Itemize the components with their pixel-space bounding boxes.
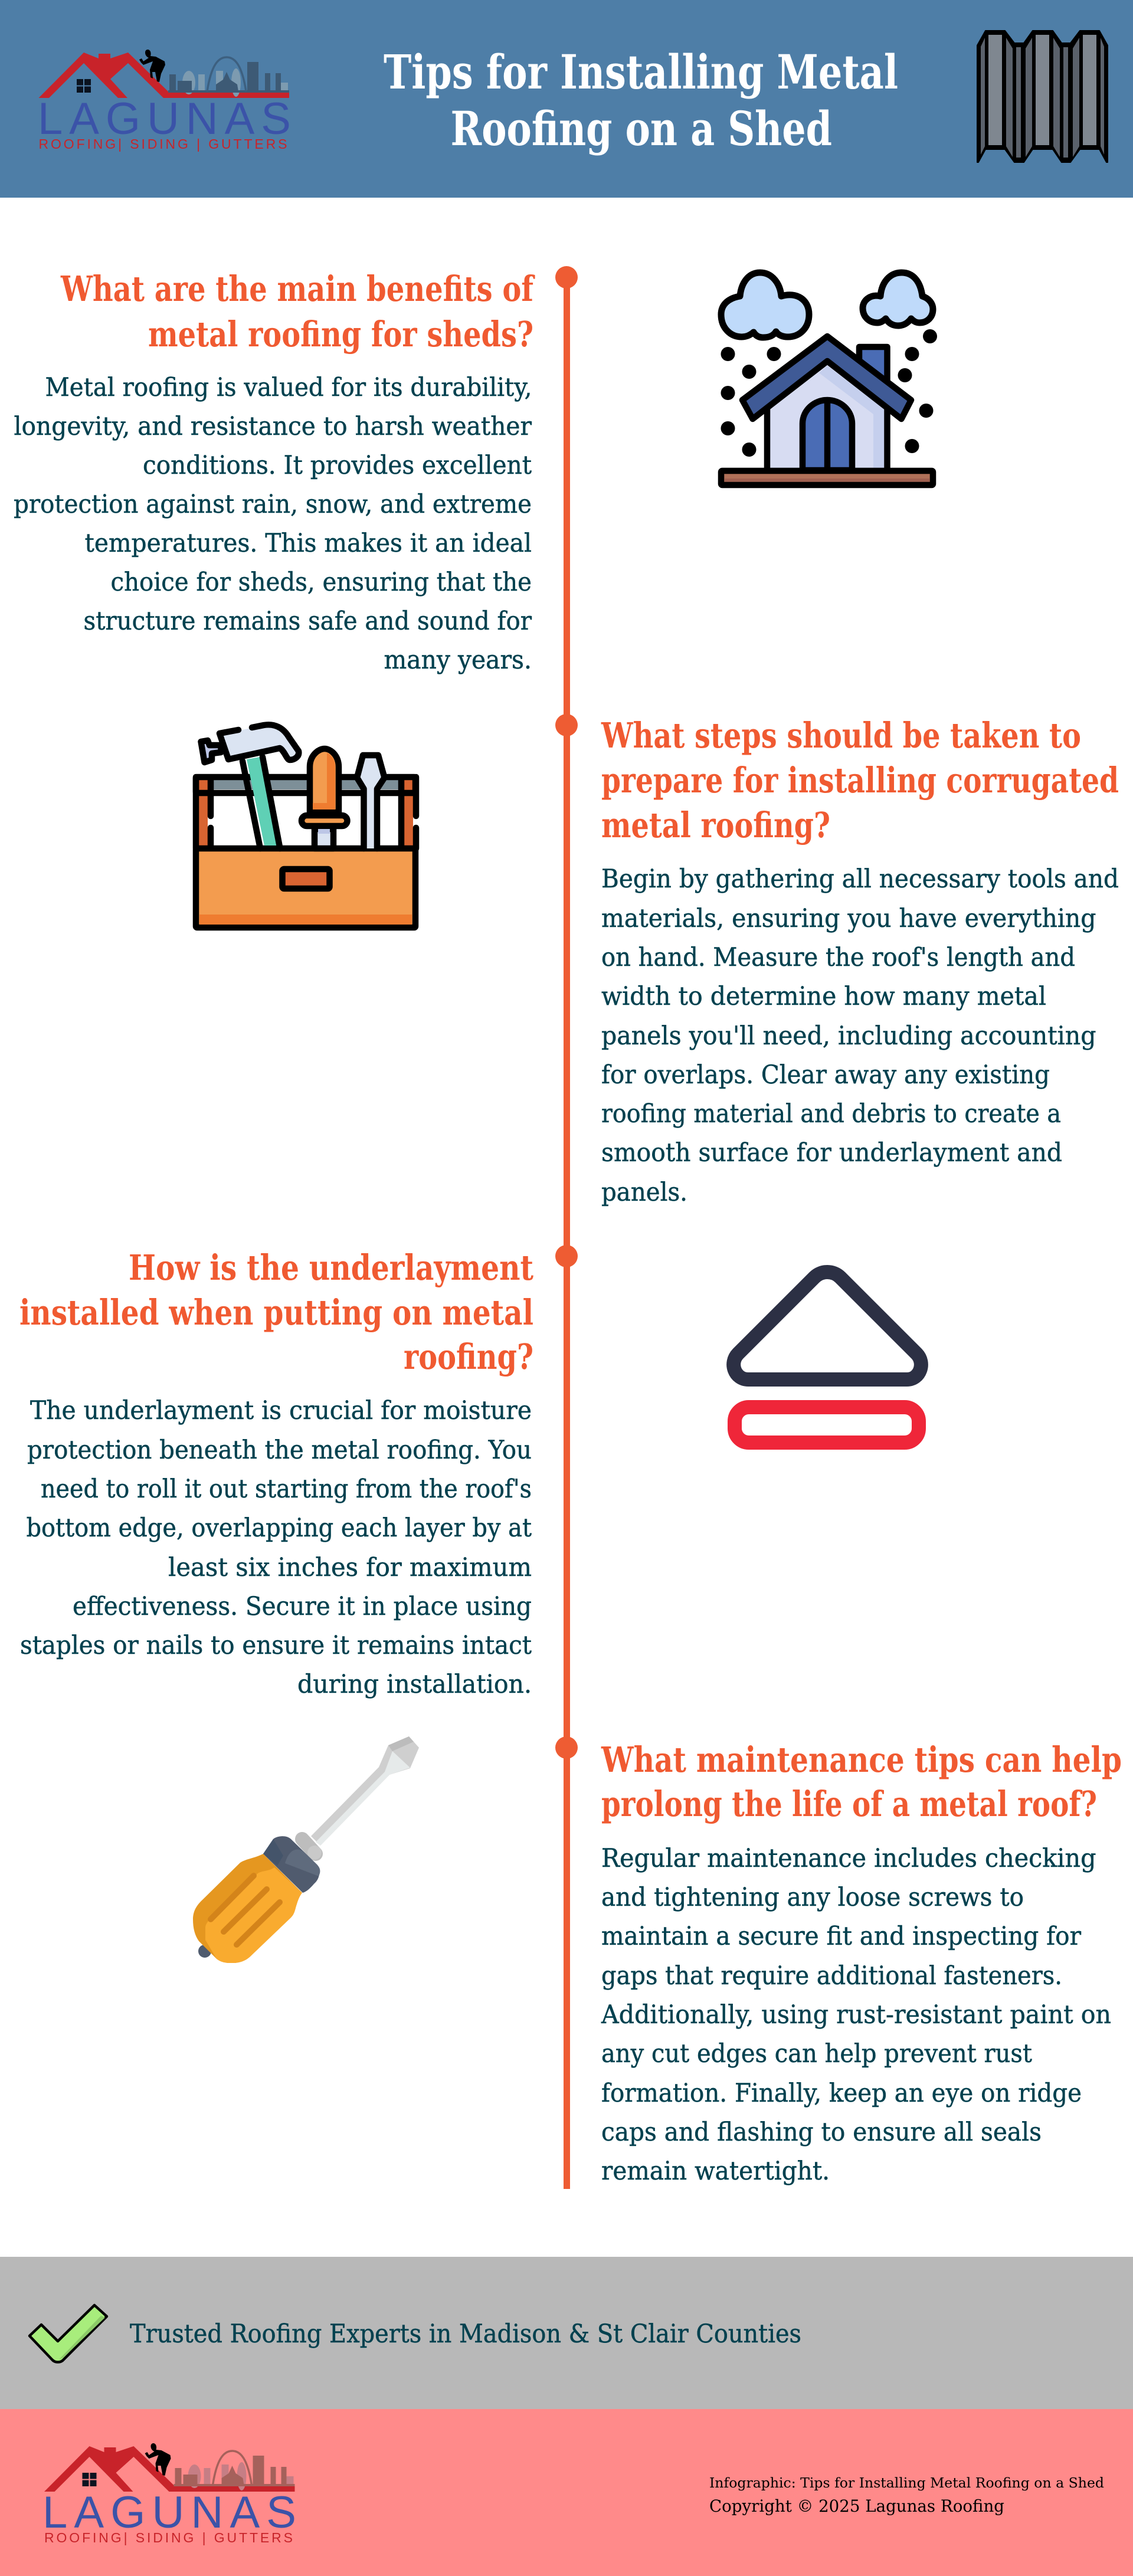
panel: benefits (14, 268, 937, 675)
timeline line (555, 266, 578, 2189)
text: maintenance: and tightening any loose screws to (601, 1883, 1024, 1912)
footer credits: Copyright © 2025 Lagunas Roofing (709, 2496, 1004, 2516)
timeline dot 4 (555, 1736, 578, 1759)
text: underlayment (20, 1396, 532, 1699)
panel: maintenance (193, 1736, 1122, 2186)
text: preparation: width to determine how many metal (601, 982, 1046, 1011)
icon: check mark (30, 2305, 107, 2362)
heading: maintenance (601, 1739, 1122, 1824)
text: underlayment: protection beneath the metal roofing. You (27, 1436, 532, 1465)
footer credits: Infographic: Tips for Installing Metal Roofing on a Shed (709, 2476, 1104, 2491)
timeline dot 1 (555, 266, 578, 289)
trust banner (0, 2257, 1133, 2409)
icon: underlayment layers (733, 1272, 921, 1443)
text: benefits: Metal roofing is valued for its durability, (45, 373, 532, 402)
text: underlayment: The underlayment is crucial for moisture (30, 1396, 532, 1425)
footer logo (42, 2443, 296, 2545)
header logo: ROOFING| SIDING | GUTTERS (39, 136, 287, 152)
header logo (38, 50, 291, 152)
panel: preparation (196, 715, 1119, 1207)
text: maintenance: Additionally, using rust-resistant paint on (601, 2000, 1111, 2030)
text: preparation: for overlaps. Clear away any existing (601, 1060, 1050, 1090)
heading: underlayment: installed when putting on metal (19, 1292, 533, 1333)
panel: underlayment (19, 1247, 921, 1699)
text: benefits: temperatures. This makes it an ideal (85, 529, 532, 558)
heading: benefits (60, 268, 535, 355)
text: preparation: on hand. Measure the roof's length and (601, 943, 1075, 972)
heading: preparation (601, 715, 1119, 845)
heading: underlayment (19, 1247, 533, 1377)
icon: house in storm (721, 273, 937, 485)
text: benefits: structure remains safe and sound for (84, 607, 532, 636)
text: preparation: panels you'll need, including accounting (601, 1021, 1096, 1051)
text: underlayment: during installation. (297, 1670, 532, 1699)
text: benefits: many years. (384, 645, 532, 675)
text: maintenance: gaps that require additional fasteners. (601, 1961, 1062, 1991)
text: maintenance: Regular maintenance includes checking (601, 1844, 1096, 1873)
text: preparation: smooth surface for underlayment and (601, 1138, 1062, 1168)
footer credits (709, 2476, 1104, 2516)
title: Roofing on a Shed (451, 101, 832, 156)
text: benefits: longevity, and resistance to harsh weather (14, 412, 532, 441)
footer logo: ROOFING| SIDING | GUTTERS (44, 2530, 293, 2545)
text: benefits: protection against rain, snow, and extreme (14, 490, 532, 519)
text: preparation (601, 864, 1119, 1207)
text: preparation: materials, ensuring you have everything (601, 904, 1096, 933)
title: Tips for Installing Metal (384, 44, 898, 100)
trust text: Trusted Roofing Experts in Madison & St Clair Counties (130, 2319, 801, 2349)
heading: benefits: metal roofing for sheds? (148, 314, 533, 355)
text: preparation: roofing material and debris to create a (601, 1099, 1061, 1129)
text: underlayment: staples or nails to ensure it remains intact (20, 1631, 532, 1660)
text: underlayment: effectiveness. Secure it in place using (73, 1592, 532, 1621)
heading: preparation: metal roofing? (601, 805, 830, 845)
header band (0, 0, 1133, 198)
header logo: LAGUNAS (38, 94, 291, 144)
heading: underlayment: How is the underlayment (129, 1247, 533, 1288)
icon: corrugated metal panel (977, 31, 1108, 162)
text: underlayment: need to roll it out starting from the roof's (41, 1474, 532, 1504)
text: maintenance: any cut edges can help prevent rust (601, 2039, 1032, 2069)
text: benefits: choice for sheds, ensuring that the (111, 568, 532, 597)
text: underlayment: least six inches for maximum (168, 1553, 532, 1582)
timeline dot 2 (555, 714, 578, 736)
footer band (0, 2409, 1133, 2576)
text: underlayment: bottom edge, overlapping each layer by at (26, 1513, 532, 1543)
text: maintenance: caps and flashing to ensure all seals (601, 2118, 1042, 2147)
title (384, 44, 898, 156)
text: maintenance (601, 1844, 1111, 2186)
text: maintenance: remain watertight. (601, 2157, 830, 2186)
text: maintenance: formation. Finally, keep an eye on ridge (601, 2079, 1082, 2108)
footer logo: LAGUNAS (42, 2487, 296, 2538)
text: benefits (14, 373, 532, 675)
text: preparation: panels. (601, 1178, 687, 1207)
text: benefits: conditions. It provides excellent (143, 451, 532, 480)
heading: benefits: What are the main benefits of (60, 268, 535, 309)
icon: screwdriver (193, 1736, 419, 1963)
text: maintenance: maintain a secure fit and inspecting for (601, 1922, 1081, 1951)
timeline dot 3 (555, 1245, 578, 1267)
heading: underlayment: roofing? (404, 1336, 533, 1377)
icon: toolbox (196, 725, 416, 928)
